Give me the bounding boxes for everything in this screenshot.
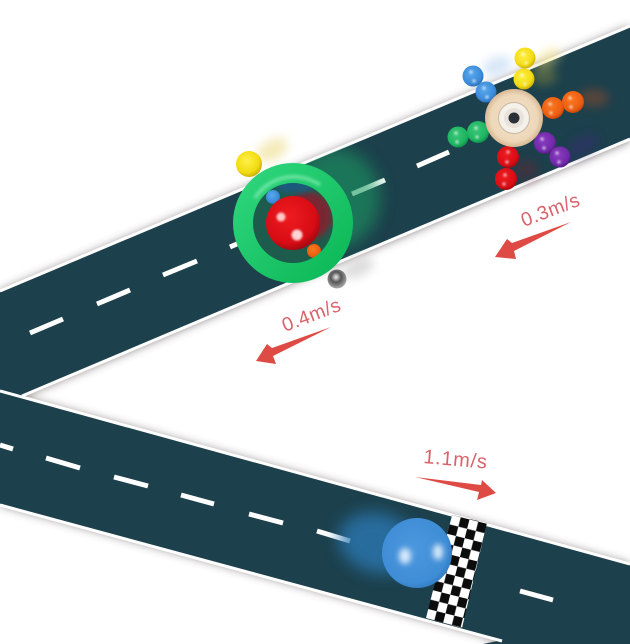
- upper road centre dashes: [30, 152, 449, 333]
- arrow: 1.1m/s direction: [415, 477, 496, 500]
- small blue bead: [266, 190, 280, 204]
- bead highlights: [454, 52, 573, 186]
- finish line: checkered band: [426, 515, 487, 628]
- motion blur trail: blue ball: [332, 504, 424, 582]
- red ball: [266, 196, 320, 250]
- silver ball trail: [339, 254, 377, 282]
- green beads: [448, 121, 489, 148]
- arrow: 0.3m/s direction: [495, 222, 571, 259]
- green ring with red ball: [243, 173, 343, 273]
- green ring motion glow: [290, 148, 380, 248]
- lower road: [0, 391, 630, 644]
- arrow: 0.4m/s direction: [256, 327, 331, 364]
- speed label: 0.3m/s: 0.3m/s: [518, 189, 583, 232]
- small orange bead: [307, 244, 321, 258]
- bead motion trails: [480, 43, 609, 180]
- yellow ball trail: [252, 133, 292, 167]
- upper road: [0, 26, 630, 396]
- spinner toy with coloured beads: [448, 43, 609, 190]
- speed label: 0.4m/s: 0.4m/s: [279, 294, 344, 337]
- wooden hub: [485, 89, 543, 147]
- speed label: 1.1m/s: 1.1m/s: [423, 446, 488, 474]
- purple beads: [534, 132, 570, 168]
- lower road centre dashes: [0, 445, 553, 600]
- silver ball: [328, 270, 346, 288]
- ring interior: [249, 179, 337, 267]
- green ring: [243, 173, 343, 273]
- yellow ball: [236, 151, 262, 177]
- red beads: [495, 146, 519, 190]
- orange beads: [542, 91, 584, 119]
- blue beads: [462, 66, 496, 102]
- yellow beads: [514, 48, 536, 90]
- blue ball: [382, 518, 452, 588]
